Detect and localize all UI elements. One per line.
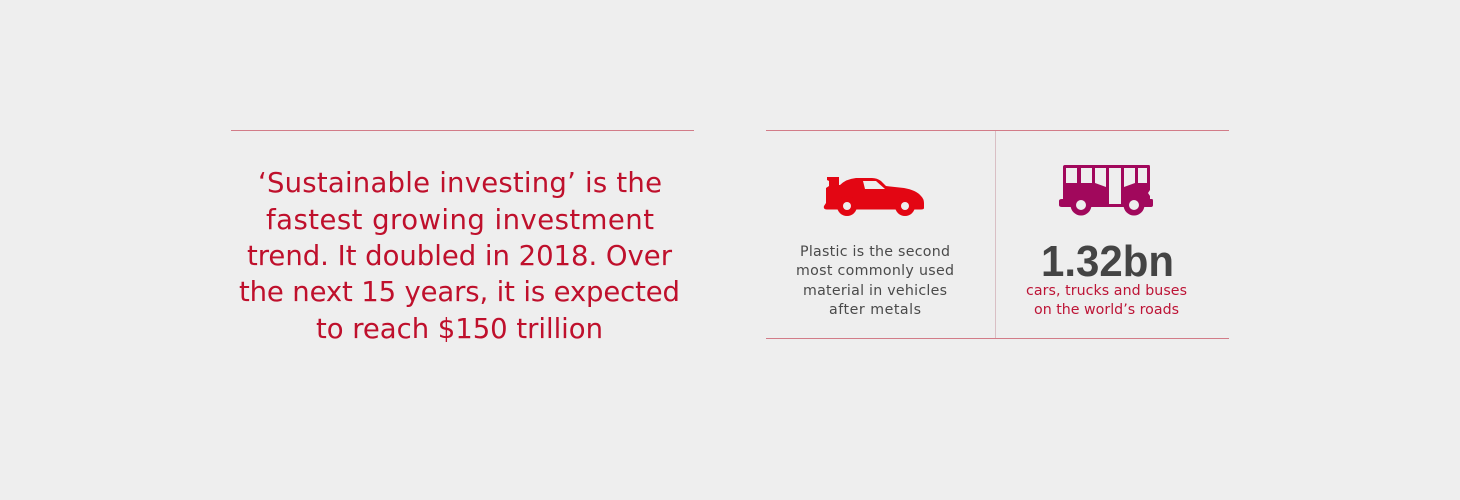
text block: plastic fact: material in vehicles [803,283,947,299]
text block: plastic fact: most commonly used [796,263,954,279]
text block: vehicles caption: cars, trucks and buses [1026,283,1187,299]
text block: sustainable investing: ‘Sustainable investing’ is the [258,167,662,199]
text block: plastic fact: Plastic is the second [800,244,950,260]
text block: sustainable investing: to reach $150 trillion [316,313,603,345]
panel: vehicle facts [766,130,1229,338]
icon: red car [824,177,924,216]
text block: plastic fact [796,244,954,318]
text block: plastic fact: after metals [829,302,921,318]
text block: sustainable investing: the next 15 years, it is expected [239,276,680,308]
text block: sustainable investing [239,167,680,345]
text block: sustainable investing: trend. It doubled in 2018. Over [247,240,673,272]
text block: vehicles caption [1026,283,1187,318]
text block: sustainable investing: fastest growing investment [266,204,654,236]
icon: purple bus [1059,165,1153,216]
panel: sustainable investing statement [231,130,694,345]
text block: vehicles caption: on the world’s roads [1034,302,1179,318]
big number: 1.32bn: 1.32bn [1041,237,1174,286]
